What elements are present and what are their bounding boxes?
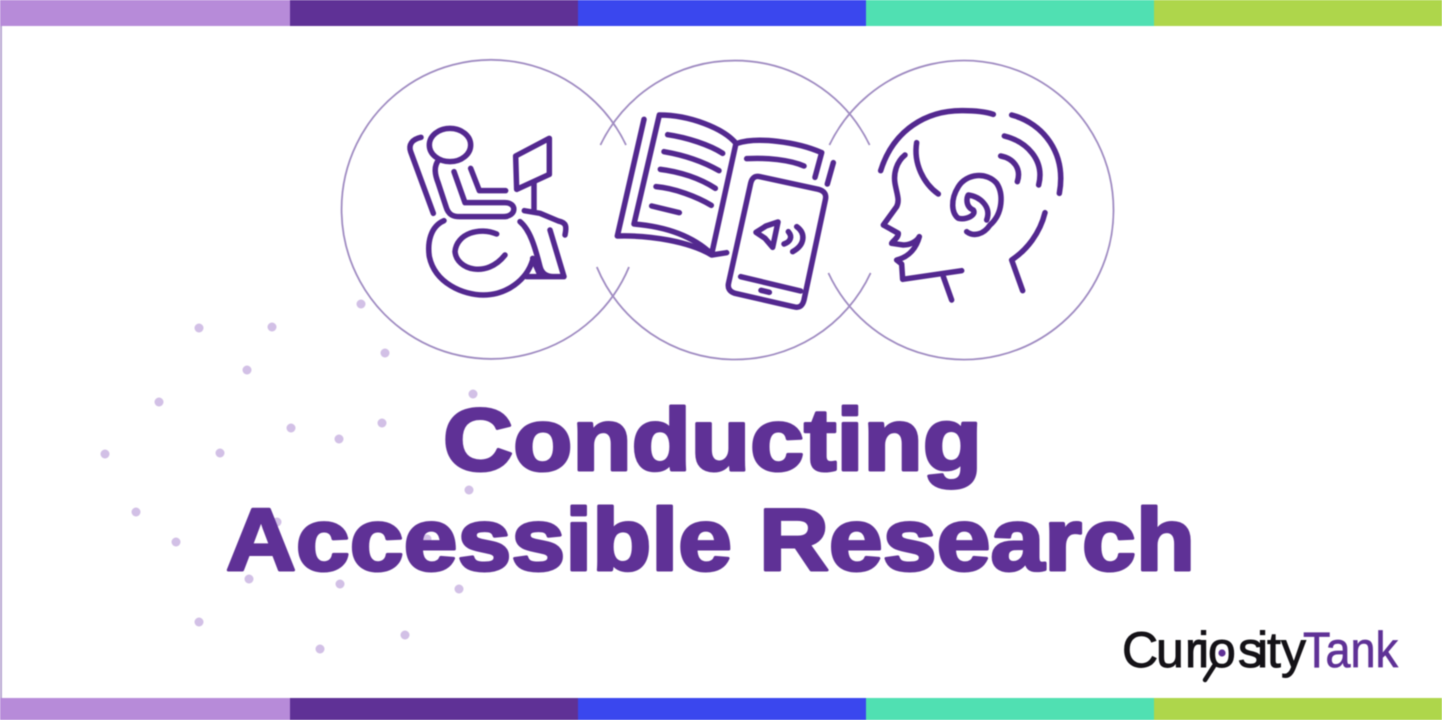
- title: [226, 390, 1195, 589]
- logo: Curiosity Tank: Curiosity: [1122, 622, 1306, 678]
- background dot scatter: [100, 300, 478, 654]
- bottom colour bar: [0, 698, 1442, 720]
- title: Conducting: [443, 390, 982, 489]
- three overlapping circle outlines: [342, 60, 1114, 360]
- logo: Curiosity Tank: [1122, 622, 1399, 680]
- logo: Curiosity Tank: Tank: [1303, 622, 1399, 678]
- icon: wheelchair user at a screen: [410, 128, 566, 295]
- icon: open book with audio phone: [617, 115, 833, 307]
- icon: head profile with hearing aid and sound waves: [881, 111, 1061, 300]
- top colour bar: [0, 0, 1442, 26]
- title: Accessible Research: [226, 490, 1195, 589]
